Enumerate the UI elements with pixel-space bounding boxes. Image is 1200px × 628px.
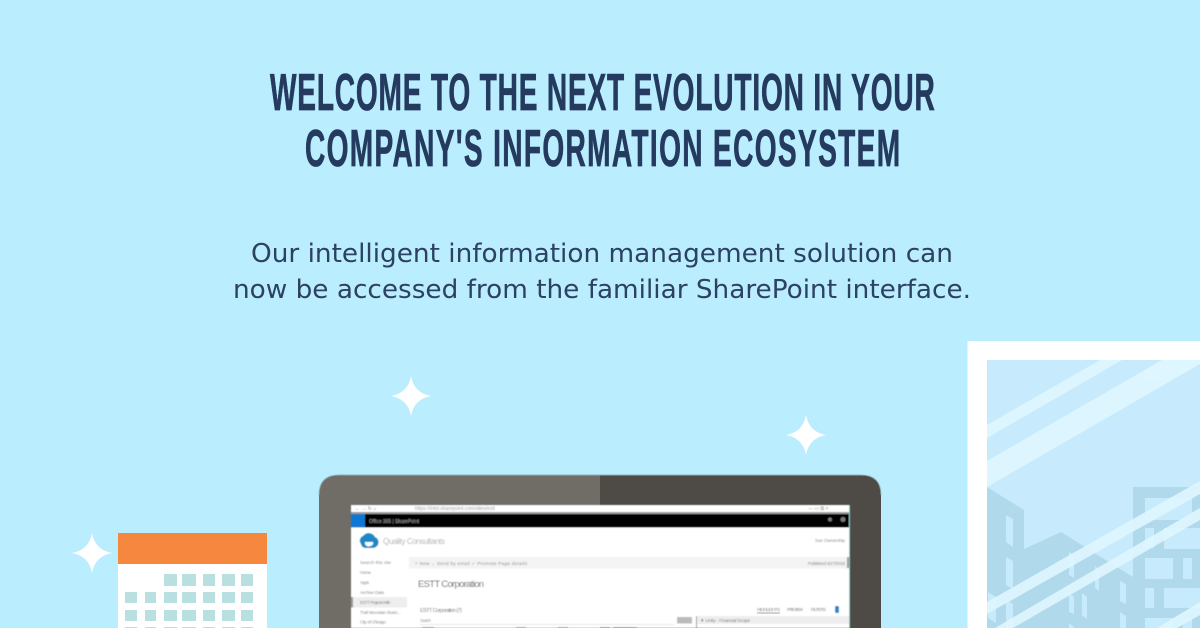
laptop [319,475,881,628]
site navigation: Apps [360,580,370,585]
site navigation: Search this site [360,560,391,565]
title: COMPANY'S INFORMATION ECOSYSTEM [305,119,900,177]
browser address bar: ← → ↻ ⌂ [355,506,376,512]
calendar header [118,533,267,564]
building windows [988,498,1200,628]
site navigation: Trail Mountain Busin... [360,610,401,615]
icon: sparkle top right [786,415,826,455]
browser address bar: https://intel.sharepoint.com/sites/estt [415,506,496,512]
document tabs: FILTERS [811,607,826,612]
command toolbar: + New ⌄ Send by email ✓ Promote Page details [415,561,528,566]
calendar day squares [125,574,253,628]
glass reflections [987,360,1200,628]
office 365 black bar [351,514,849,528]
filter panel: ▼ Unity - Financial Scope [700,618,750,623]
window frame [968,341,1200,628]
command toolbar [409,557,849,568]
filter panel [677,616,849,628]
intro text: now be accessed from the familiar SharePoint interface. [233,275,971,305]
page heading: ESTT Corporation [418,579,484,590]
icon: sparkle by calendar [72,533,112,573]
title: WELCOME TO THE NEXT EVOLUTION IN YOUR [270,63,935,121]
window with city view [968,341,1200,628]
site navigation: City of Chicago [360,620,386,624]
browser address bar: — ▭ ⧉ × [808,506,828,512]
intro text: Our intelligent information management solution can [251,239,953,269]
calendar page [118,564,267,628]
site navigation [351,560,407,624]
calendar [118,533,267,628]
quality consultants logo [360,533,445,548]
site navigation: Archive Data [360,590,384,595]
document tabs: HIGHLIGHTS [757,607,780,612]
laptop bezel [319,475,881,628]
quality consultants logo: Quality Consultants [383,537,445,546]
city skyline [987,487,1200,628]
list heading: ESTT Corporation (7) [420,608,462,614]
table header [420,624,675,628]
title [270,63,935,177]
browser address bar [351,506,849,514]
laptop screen: SharePoint interface [351,505,850,628]
document tabs [757,606,839,614]
command toolbar: Published 4/27/2018 [808,561,845,566]
document tabs: PREVIEW [787,607,804,612]
intro text [233,239,971,305]
site navigation: Home [360,570,371,575]
see ownership link: See Ownership [815,538,845,543]
office 365 black bar: Office 365 | SharePoint [369,519,420,525]
icon: sparkle top left [391,376,431,416]
search label: Search [420,618,431,623]
site navigation: ESTT Projects Wiki [360,600,390,605]
window sky [987,360,1200,628]
